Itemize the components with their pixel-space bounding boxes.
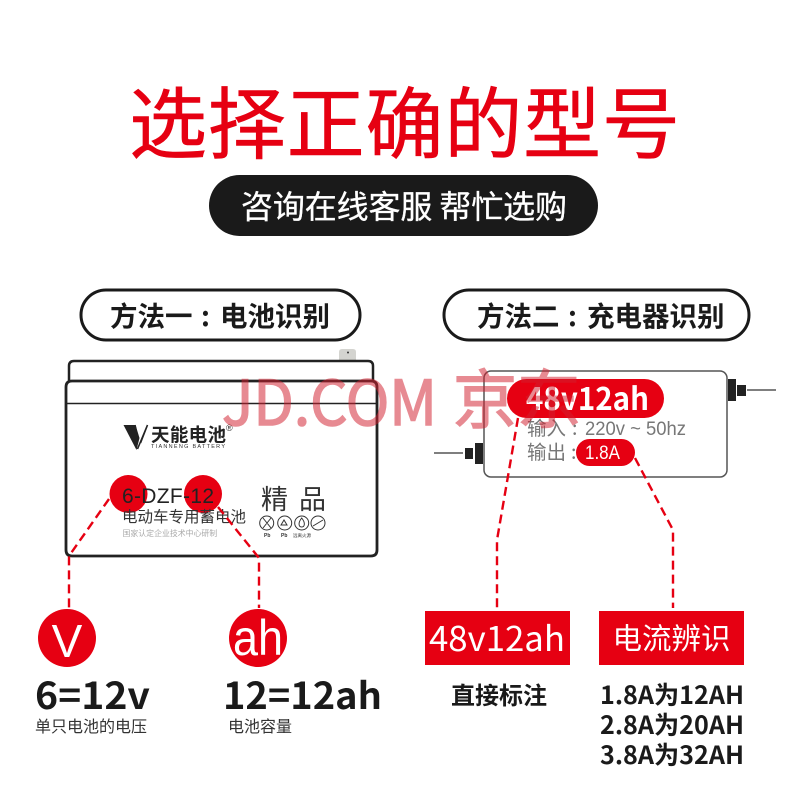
capacity caption: 电池容量	[228, 713, 292, 737]
capacity marker	[184, 475, 222, 513]
current badge	[576, 439, 635, 466]
compliance icons: 远离火源	[293, 532, 311, 539]
battery illustration	[66, 349, 377, 556]
charger body	[484, 371, 727, 477]
dashed connector: current	[635, 458, 673, 608]
label box: 48v12ah: 48v12ah	[429, 612, 565, 661]
badge: V: V	[52, 615, 83, 667]
current to capacity list: 3.8A为32AH	[600, 736, 744, 772]
current to capacity list: 2.8A为20AH	[600, 706, 744, 742]
input spec: 输入	[527, 412, 566, 441]
current to capacity list: 1.8A为12AH	[600, 676, 744, 712]
charger left plug	[465, 443, 483, 464]
heading: method two: 充电器识别	[587, 294, 724, 334]
input spec: 220v ~ 50hz	[585, 418, 686, 440]
heading: method two: :	[568, 294, 577, 334]
charger illustration	[434, 371, 776, 477]
badge: ah: ah	[233, 610, 283, 666]
voltage result: 6=12v	[35, 666, 150, 720]
compliance icons	[260, 516, 325, 539]
dashed connector: model	[497, 418, 518, 608]
battery type text: 电动车专用蓄电池	[122, 505, 246, 527]
voltage caption: 单只电池的电压	[35, 713, 147, 737]
heading: method one: :	[201, 294, 210, 334]
compliance icons: Pb	[281, 533, 287, 539]
watermark	[222, 350, 581, 443]
label box: current identification: 电流辨识	[612, 616, 731, 658]
title: 选择正确的型号	[129, 63, 680, 175]
subtitle pill: 咨询在线客服 帮忙选购	[241, 182, 567, 228]
brand logo: ®	[226, 423, 233, 433]
output label: 输出	[527, 436, 566, 465]
brand logo: 天能电池	[151, 422, 226, 448]
current to capacity list	[600, 676, 744, 772]
watermark: 京东	[453, 350, 581, 442]
dashed connector: capacity	[218, 507, 259, 608]
input spec: :	[572, 412, 577, 441]
direct marking caption: 直接标注	[451, 676, 547, 711]
heading: method one: 电池识别	[220, 294, 330, 334]
capacity result: 12=12ah	[223, 666, 382, 720]
subtitle pill	[209, 175, 598, 236]
badge: V	[38, 609, 96, 667]
premium label: 精	[261, 478, 288, 517]
model text: 6-DZF-12	[122, 485, 214, 508]
small print: 国家认定企业技术中心研制	[122, 528, 217, 539]
label box: current identification	[599, 611, 744, 665]
current badge: 1.8A	[585, 443, 620, 464]
model badge: 48v12ah	[526, 374, 649, 419]
battery body	[66, 381, 377, 556]
heading: method two: 方法二	[477, 294, 560, 334]
voltage marker	[110, 475, 148, 513]
dashed connector: voltage	[69, 499, 109, 608]
compliance icons: Pb	[264, 533, 270, 539]
heading: method two	[444, 290, 749, 340]
watermark: JD.COM	[222, 353, 437, 443]
battery terminal	[339, 349, 356, 360]
output label: :	[571, 436, 576, 465]
heading: method one	[81, 290, 360, 340]
premium label	[261, 478, 326, 517]
charger right plug	[728, 379, 746, 401]
brand logo: TIANNENG BATTERY	[151, 444, 225, 450]
premium label: 品	[299, 478, 326, 517]
heading: method one: 方法一	[110, 294, 192, 334]
battery lid	[69, 361, 373, 381]
brand logo	[124, 422, 233, 450]
